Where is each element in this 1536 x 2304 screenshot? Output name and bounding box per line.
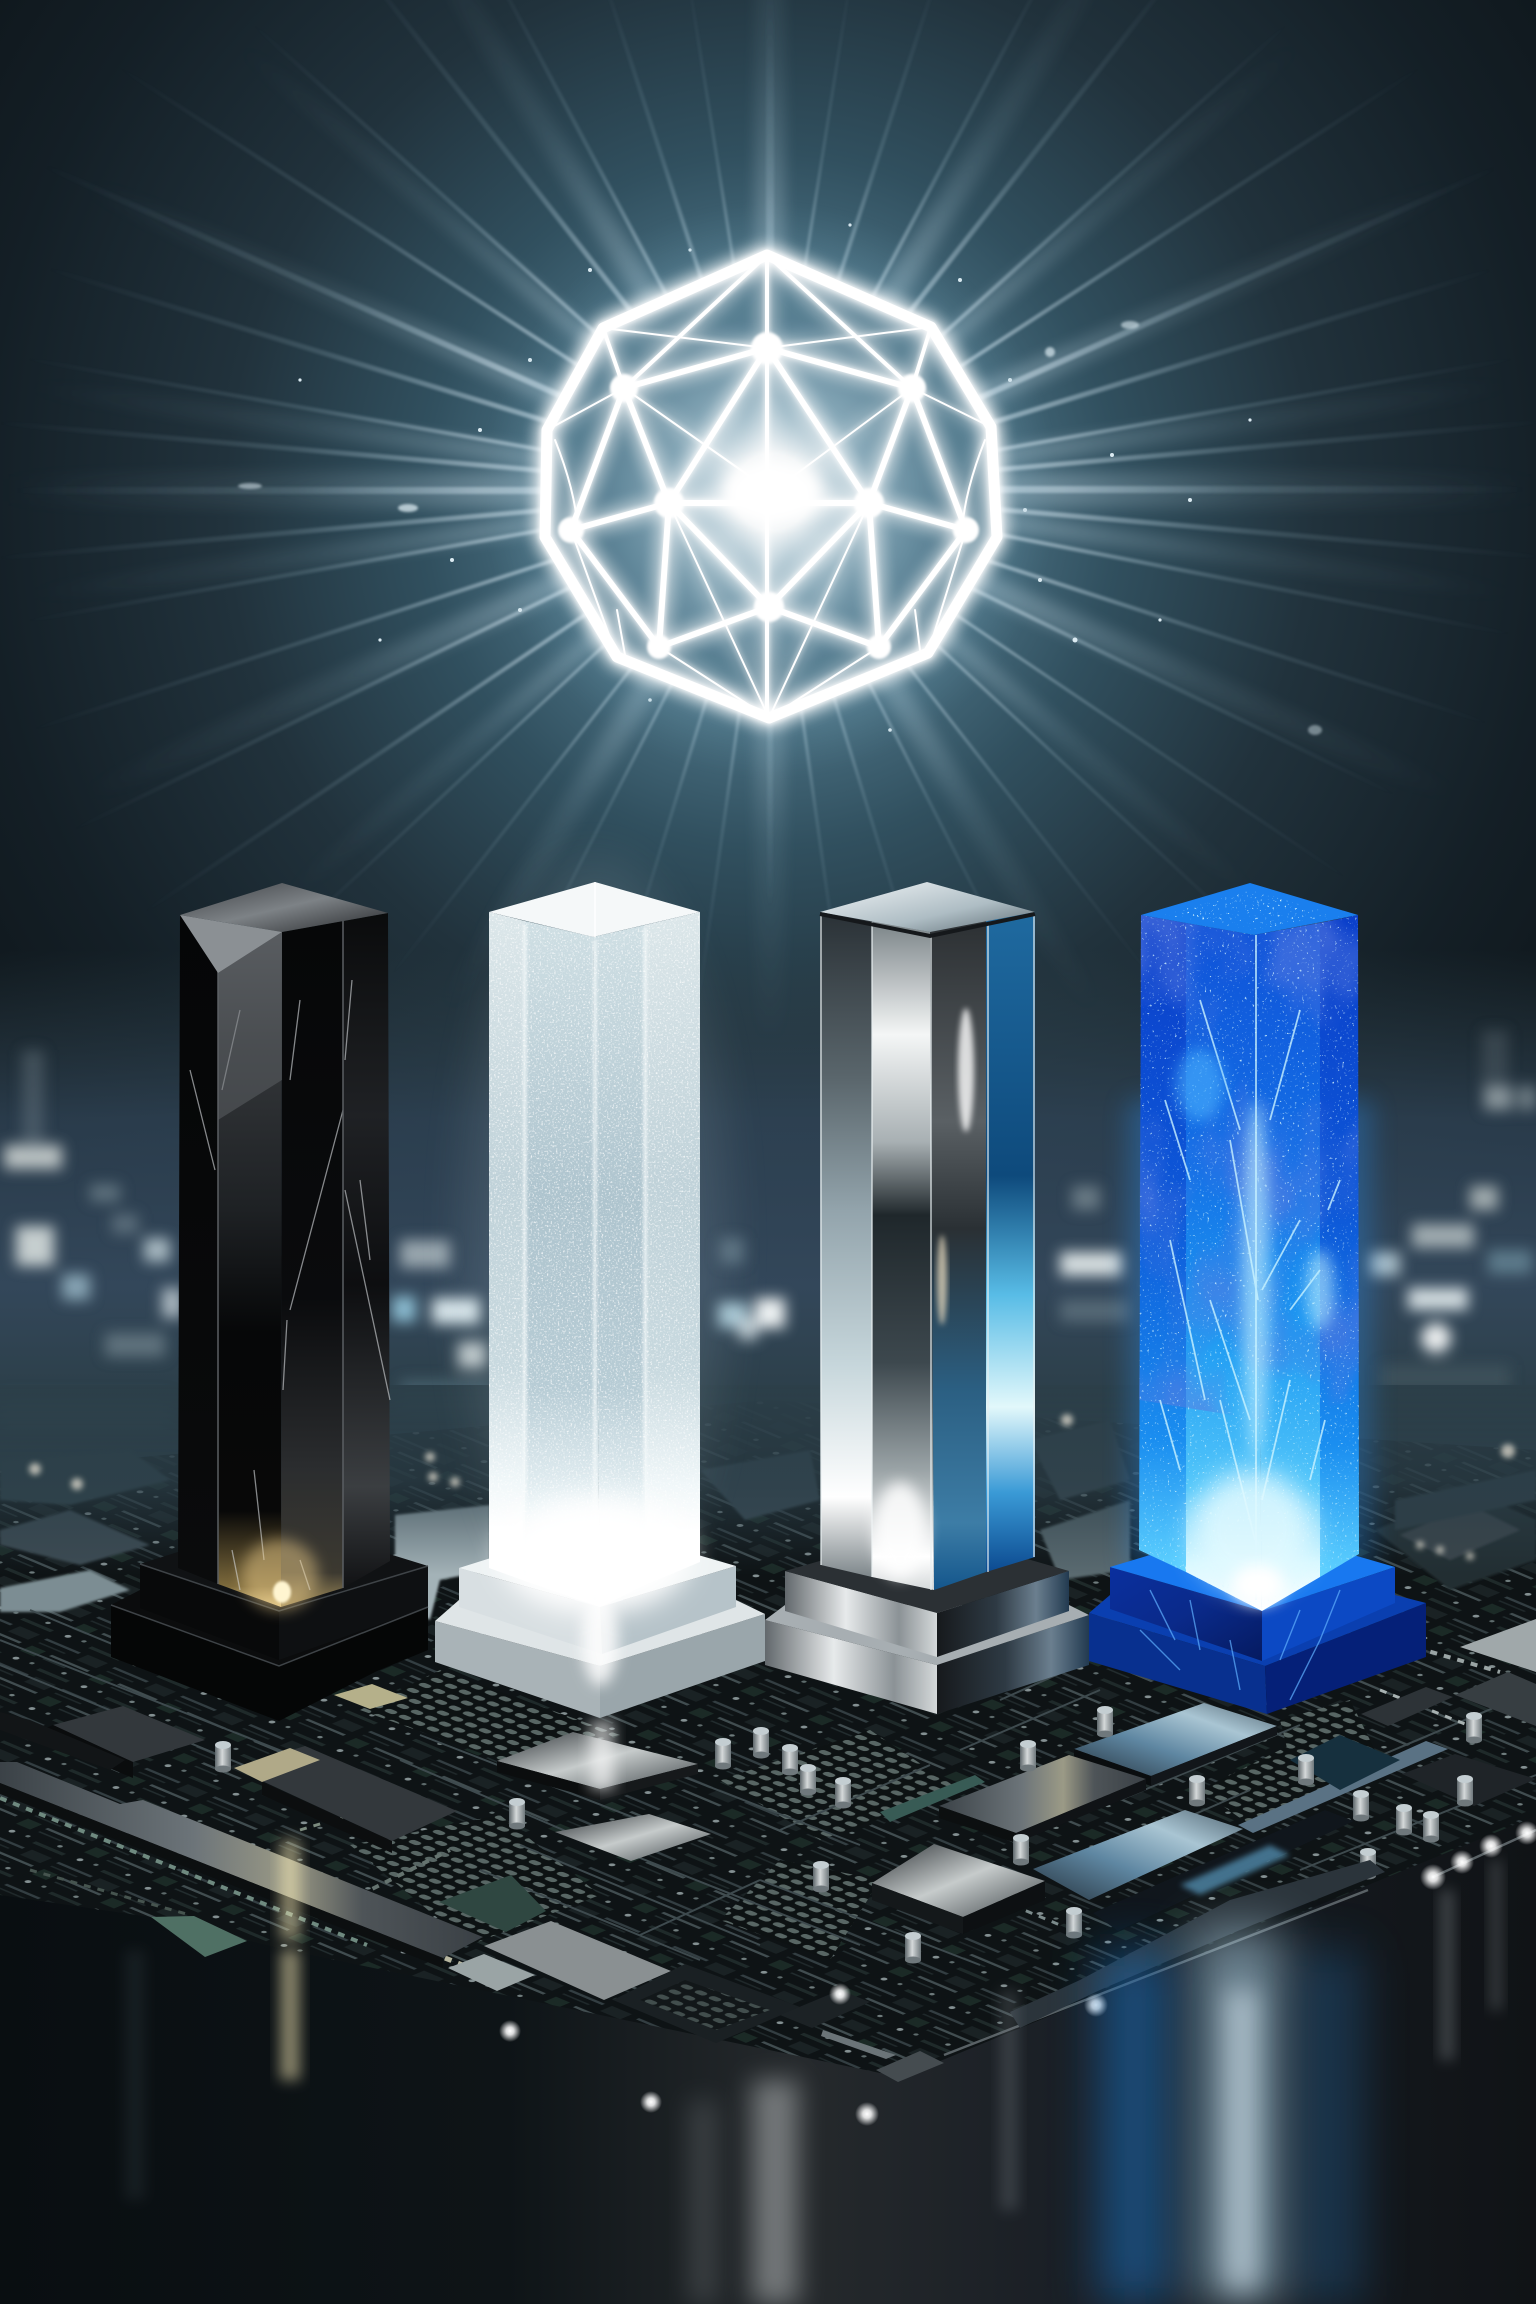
blue centre-right band xyxy=(1254,923,1320,1611)
chrome edge lines xyxy=(821,914,1034,1590)
chrome reflection streaks xyxy=(874,1008,974,1578)
solder fields xyxy=(350,1670,1380,1960)
gold spark at base xyxy=(242,1539,318,1611)
white right band xyxy=(645,912,700,1585)
black right face xyxy=(281,921,343,1607)
white pillar glow xyxy=(465,860,725,1620)
blue left band xyxy=(1139,915,1186,1572)
blue core glow xyxy=(1176,1049,1334,1605)
blue filaments xyxy=(1160,935,1340,1600)
black chamfer faces xyxy=(178,915,218,1584)
dotted solder strips xyxy=(0,1640,1500,1968)
white base glow xyxy=(500,1497,690,1613)
geodesic sphere xyxy=(480,200,1060,780)
capacitors xyxy=(215,1706,1482,1964)
floor traces and contact pads xyxy=(499,1821,1536,2126)
chrome top xyxy=(820,882,1035,932)
pillar 4: glowing blue crystal xyxy=(1089,883,1426,1714)
circuit board xyxy=(0,1385,1536,2073)
chips xyxy=(0,1619,1536,2043)
blue base xyxy=(1089,1525,1426,1714)
blue top xyxy=(1141,883,1358,935)
chrome band D xyxy=(986,912,1035,1572)
rear board bokeh dots xyxy=(29,1414,1515,1560)
blurred city lights in the distance xyxy=(0,1030,1536,1425)
chrome band C xyxy=(930,921,986,1590)
white top xyxy=(489,882,700,937)
light rays radiating from sphere xyxy=(0,0,1536,1050)
white frost texture xyxy=(489,912,700,1607)
board substrate xyxy=(0,1400,1536,2073)
pillar 1: black obsidian xyxy=(111,883,428,1721)
white centre-right band xyxy=(593,925,645,1607)
blue outer glow xyxy=(1128,1100,1372,1570)
black right chamfer xyxy=(343,913,390,1588)
reflective floor xyxy=(0,1750,1536,2304)
white base xyxy=(435,1525,765,1718)
sphere nodes xyxy=(558,332,979,659)
black left face xyxy=(218,922,282,1607)
sphere core light xyxy=(724,462,820,522)
chrome band B xyxy=(872,921,934,1590)
pillar 3: polished chrome xyxy=(765,882,1089,1714)
blue centre-left band xyxy=(1186,923,1262,1611)
chrome base xyxy=(765,1530,1089,1714)
white left band xyxy=(489,912,525,1581)
distance fog over rear of board xyxy=(0,1385,1536,1575)
floor reflections xyxy=(125,1720,1502,2304)
iso trace lines xyxy=(0,1610,1536,1965)
rear blurred components xyxy=(0,1420,1536,1620)
black base xyxy=(111,1520,428,1721)
pillar 2: frosted white xyxy=(435,860,765,1718)
floating light specks xyxy=(238,223,1322,735)
sphere wireframe xyxy=(545,255,997,718)
blue right band xyxy=(1320,915,1359,1577)
black edge highlight xyxy=(218,921,343,1588)
black scratches xyxy=(190,980,390,1590)
sphere halo and glass interior xyxy=(480,200,1060,780)
blue cloud shading xyxy=(1139,915,1359,1420)
blue glitter texture xyxy=(1139,915,1359,1611)
black top xyxy=(180,883,388,932)
white frost lines xyxy=(525,925,645,1600)
chrome band A xyxy=(820,912,872,1577)
white centre-left band xyxy=(525,921,600,1607)
